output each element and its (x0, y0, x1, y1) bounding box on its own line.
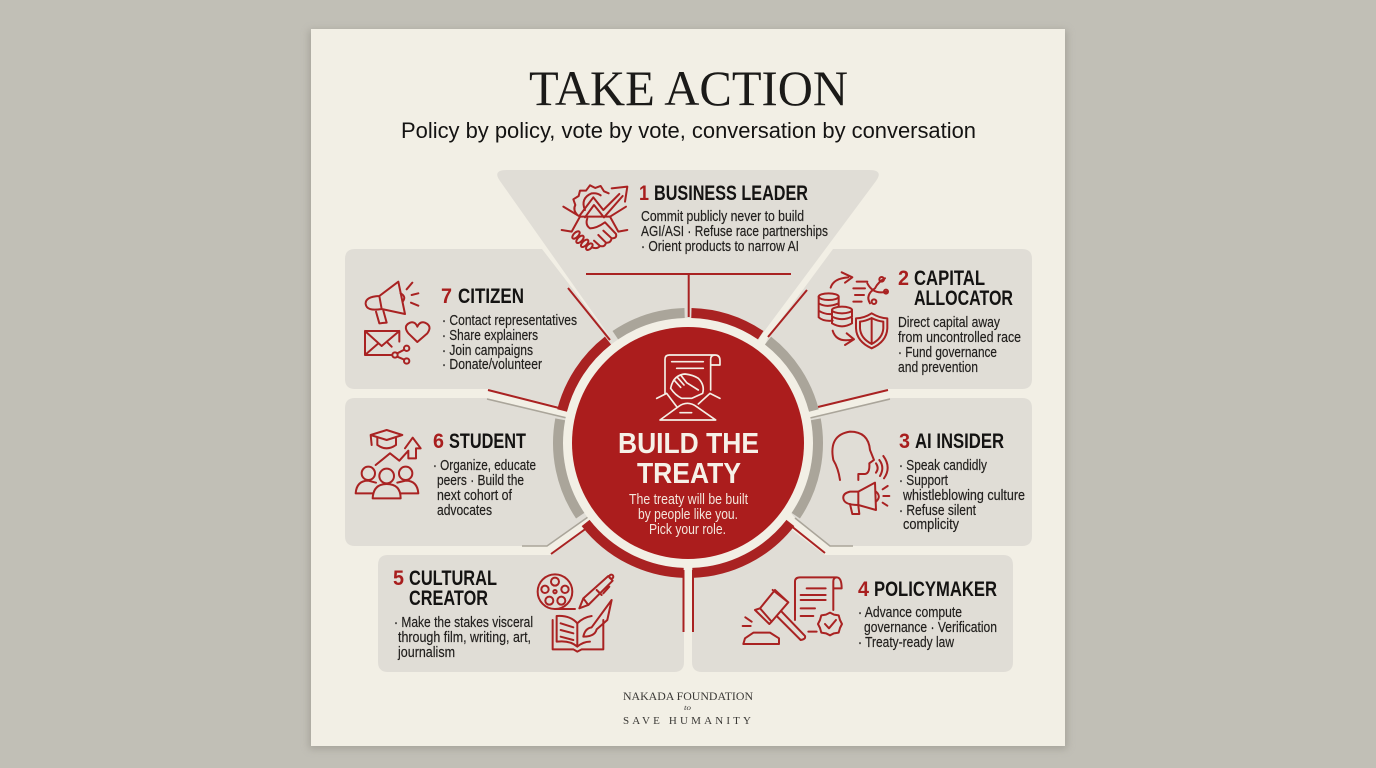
hub text: The treaty will be built (629, 492, 748, 508)
panel 4: policymaker: POLICYMAKER (874, 578, 997, 601)
body text (433, 458, 536, 519)
connectors (551, 522, 684, 632)
body text: · Make the stakes visceral (394, 615, 533, 631)
subtitle: Policy by policy, vote by vote, conversation by conversation (401, 118, 976, 143)
body text: AGI/ASI · Refuse race partnerships (641, 224, 828, 240)
red disc (572, 327, 804, 559)
footer logo: to (684, 704, 692, 712)
body text: · Support (899, 473, 948, 489)
body text: next cohort of (437, 488, 513, 504)
panel 6: student: STUDENT (449, 430, 526, 453)
panel edge lines (795, 399, 890, 546)
hub heading: TREATY (637, 458, 741, 490)
heading: 1 (639, 182, 649, 205)
heading: 7 (441, 285, 452, 308)
panel 3: AI insider: AI INSIDER (915, 430, 1004, 453)
body text (641, 209, 828, 255)
body text (898, 315, 1021, 376)
icon: gear, growth arrow and handshake (562, 185, 627, 251)
hub text: Pick your role. (649, 522, 726, 538)
body text: · Treaty-ready law (858, 635, 954, 651)
connector: top bracket (586, 274, 791, 317)
panel 3: AI insider (740, 398, 1032, 546)
body text: complicity (903, 517, 960, 533)
heading: 6 (433, 430, 444, 453)
body text: · Donate/volunteer (442, 357, 542, 373)
icon: megaphone, envelope, heart and share (365, 282, 430, 364)
panel 5: cultural creator (378, 480, 684, 672)
heading: 4 (858, 578, 869, 601)
footer logo (623, 689, 753, 727)
hub text: by people like you. (638, 507, 738, 523)
heading: 2 (898, 267, 909, 290)
body text: and prevention (898, 360, 978, 376)
icon: speaking head and megaphone (832, 432, 889, 514)
body text: governance · Verification (864, 620, 997, 636)
icon: coins, arrows, network and shield (819, 272, 888, 348)
body text: Direct capital away (898, 315, 1001, 331)
hub heading: BUILD THE (618, 428, 759, 460)
panel edge lines (487, 399, 588, 546)
panel 7: citizen (345, 249, 640, 430)
heading: 3 (899, 430, 910, 453)
connectors (768, 290, 888, 407)
body text: · Orient products to narrow AI (641, 239, 799, 255)
panel 1: business leader: BUSINESS LEADER (654, 182, 808, 205)
panel 2: capital allocator: CAPITAL (914, 267, 985, 290)
panel 7: citizen: CITIZEN (458, 285, 524, 308)
body text: · Fund governance (898, 345, 997, 361)
body text: · Contact representatives (442, 313, 577, 329)
central hub: build the treaty (558, 313, 818, 573)
panel 4: policymaker (692, 480, 1013, 672)
segmented outer ring (558, 313, 818, 573)
title: TAKE ACTION (529, 60, 848, 116)
panel 5: cultural creator: CREATOR (409, 587, 488, 610)
body text: from uncontrolled race (898, 330, 1021, 346)
hub text (629, 492, 748, 538)
icon: graduation cap, growth arrow and people (356, 430, 421, 498)
panel 1: business leader (497, 170, 879, 400)
body text: · Join campaigns (442, 343, 533, 359)
body text: · Organize, educate (433, 458, 536, 474)
connectors (693, 525, 825, 632)
hub heading (618, 428, 759, 490)
body text: whistleblowing culture (902, 488, 1025, 504)
body text: · Share explainers (442, 328, 538, 344)
body text (394, 615, 533, 661)
panel 2: capital allocator (740, 249, 1032, 420)
body text (899, 458, 1025, 533)
body text: · Advance compute (858, 605, 962, 621)
body text: peers · Build the (437, 473, 524, 489)
heading: 5 (393, 567, 404, 590)
connectors (488, 288, 610, 410)
footer logo: SAVE HUMANITY (623, 715, 751, 727)
poster card (311, 29, 1065, 746)
icon: film reel, pen, book and brush (538, 574, 613, 652)
body text: journalism (397, 645, 455, 661)
body text (442, 313, 577, 373)
hub backing disc (563, 318, 813, 568)
icon: gavel, document and seal (743, 577, 842, 644)
body text: through film, writing, art, (398, 630, 531, 646)
panel 2: capital allocator: ALLOCATOR (914, 287, 1013, 310)
panel 6: student (345, 398, 640, 546)
body text (858, 605, 997, 651)
panel 5: cultural creator: CULTURAL (409, 567, 497, 590)
body text: advocates (437, 503, 492, 519)
body text: · Refuse silent (899, 503, 976, 519)
footer logo: NAKADA FOUNDATION (623, 689, 753, 703)
icon: treaty scroll and clasped hands (657, 355, 720, 420)
body text: Commit publicly never to build (641, 209, 804, 225)
body text: · Speak candidly (899, 458, 988, 474)
